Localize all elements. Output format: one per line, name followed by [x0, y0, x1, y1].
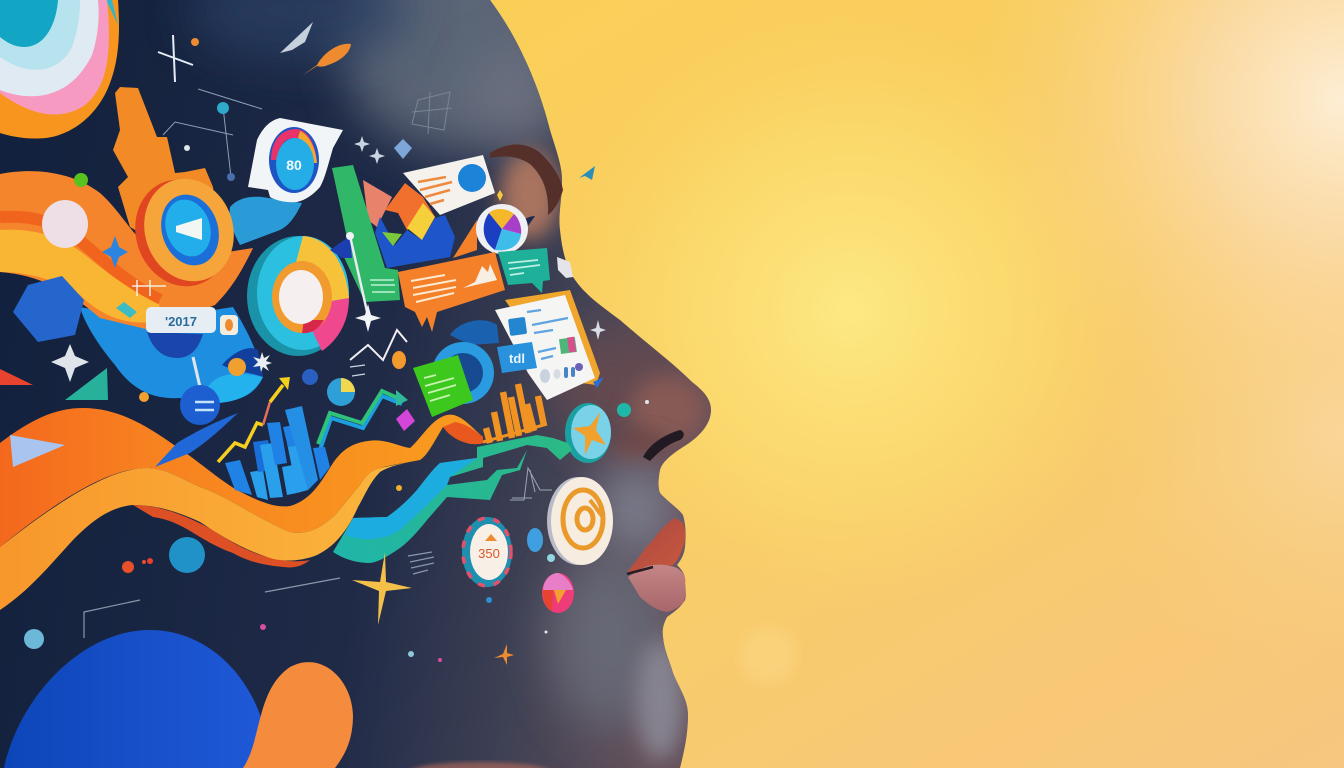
lollipop data pin — [180, 357, 220, 425]
orange small sparkle — [494, 644, 514, 665]
blue fin behind badge — [230, 197, 302, 245]
date tag — [146, 307, 238, 335]
small confetti dots — [24, 485, 548, 662]
orange flick behind pie — [453, 220, 477, 258]
blue ribbon, mid-left — [80, 307, 263, 403]
faint step chart — [510, 468, 552, 500]
teal dial badge — [565, 403, 611, 463]
lower lip — [628, 565, 686, 612]
blue star ball — [302, 369, 318, 385]
blue pointer — [155, 413, 238, 467]
small diamond — [394, 139, 412, 159]
orange blob, bottom — [243, 662, 353, 768]
pale dot — [547, 554, 555, 562]
green dot — [74, 173, 88, 187]
blue dart beside eye — [579, 166, 595, 180]
purple diamond — [396, 409, 415, 431]
green document — [413, 355, 473, 417]
orange callout — [398, 252, 505, 332]
faint connector lines — [84, 552, 434, 638]
eyebrow — [490, 144, 563, 215]
round 350 badge: 350 — [478, 546, 500, 561]
white triangle on wave — [10, 435, 65, 467]
teal stepped ribbon — [333, 435, 572, 563]
teal fold — [65, 368, 108, 400]
lower orange wave — [0, 408, 483, 610]
head silhouette — [0, 0, 711, 768]
round 350 badge — [462, 517, 512, 587]
top-left sparkles and lines — [158, 35, 452, 181]
arrow chart with ring badge — [113, 87, 247, 299]
report card — [495, 290, 604, 400]
nostril — [643, 430, 684, 461]
date tag: '2017 — [165, 314, 197, 329]
orange dot — [139, 392, 149, 402]
blue oval — [527, 528, 543, 552]
speech-bubble gauge — [248, 118, 343, 202]
upper lip — [627, 518, 685, 572]
orange feather — [303, 44, 351, 75]
teal ball — [169, 537, 205, 573]
tiny sparkle on cheek — [590, 320, 606, 340]
blue tag — [497, 342, 537, 373]
donut chart — [247, 236, 349, 356]
orange oval — [392, 351, 406, 369]
pink ball — [542, 573, 574, 613]
blue tag: tdl — [509, 351, 525, 366]
target coin — [547, 477, 613, 565]
rainbow rings, top-left — [0, 0, 119, 139]
teal tab on wave — [116, 302, 137, 318]
small badge near eye — [557, 257, 573, 278]
green bar and mountain chart — [330, 165, 455, 316]
red dart — [0, 369, 33, 385]
paper plane, top — [280, 22, 313, 53]
facial features — [490, 144, 686, 612]
gold spark by card — [497, 190, 503, 201]
eyelash — [520, 216, 535, 226]
pie chart — [476, 204, 528, 254]
blue blob, bottom-left — [4, 630, 270, 768]
sparkle — [355, 304, 381, 332]
mouth line — [627, 567, 653, 574]
green callout — [498, 248, 550, 293]
short dashes — [350, 365, 365, 376]
gold sparkle — [352, 552, 412, 625]
blue cube — [13, 276, 84, 342]
white star — [51, 344, 89, 382]
small sparkles — [354, 136, 385, 164]
upper orange wave — [0, 171, 253, 330]
pin line — [350, 236, 368, 316]
orange bar chart — [483, 384, 547, 443]
blue star — [102, 236, 128, 268]
blue radial gauge — [432, 320, 499, 404]
line chart sparkline — [350, 330, 407, 360]
speech-bubble gauge: 80 — [286, 157, 302, 173]
orange and yellow dot — [228, 358, 246, 376]
blue bar chart with arrow — [218, 377, 330, 500]
green rising arrow — [318, 390, 408, 450]
ball chart — [327, 378, 355, 406]
sparkle marks — [132, 280, 166, 296]
sun burst — [253, 352, 272, 372]
note card, top — [403, 155, 495, 215]
teal dot and white speck — [617, 400, 649, 417]
blue flag — [330, 236, 352, 258]
white ball — [42, 200, 88, 248]
